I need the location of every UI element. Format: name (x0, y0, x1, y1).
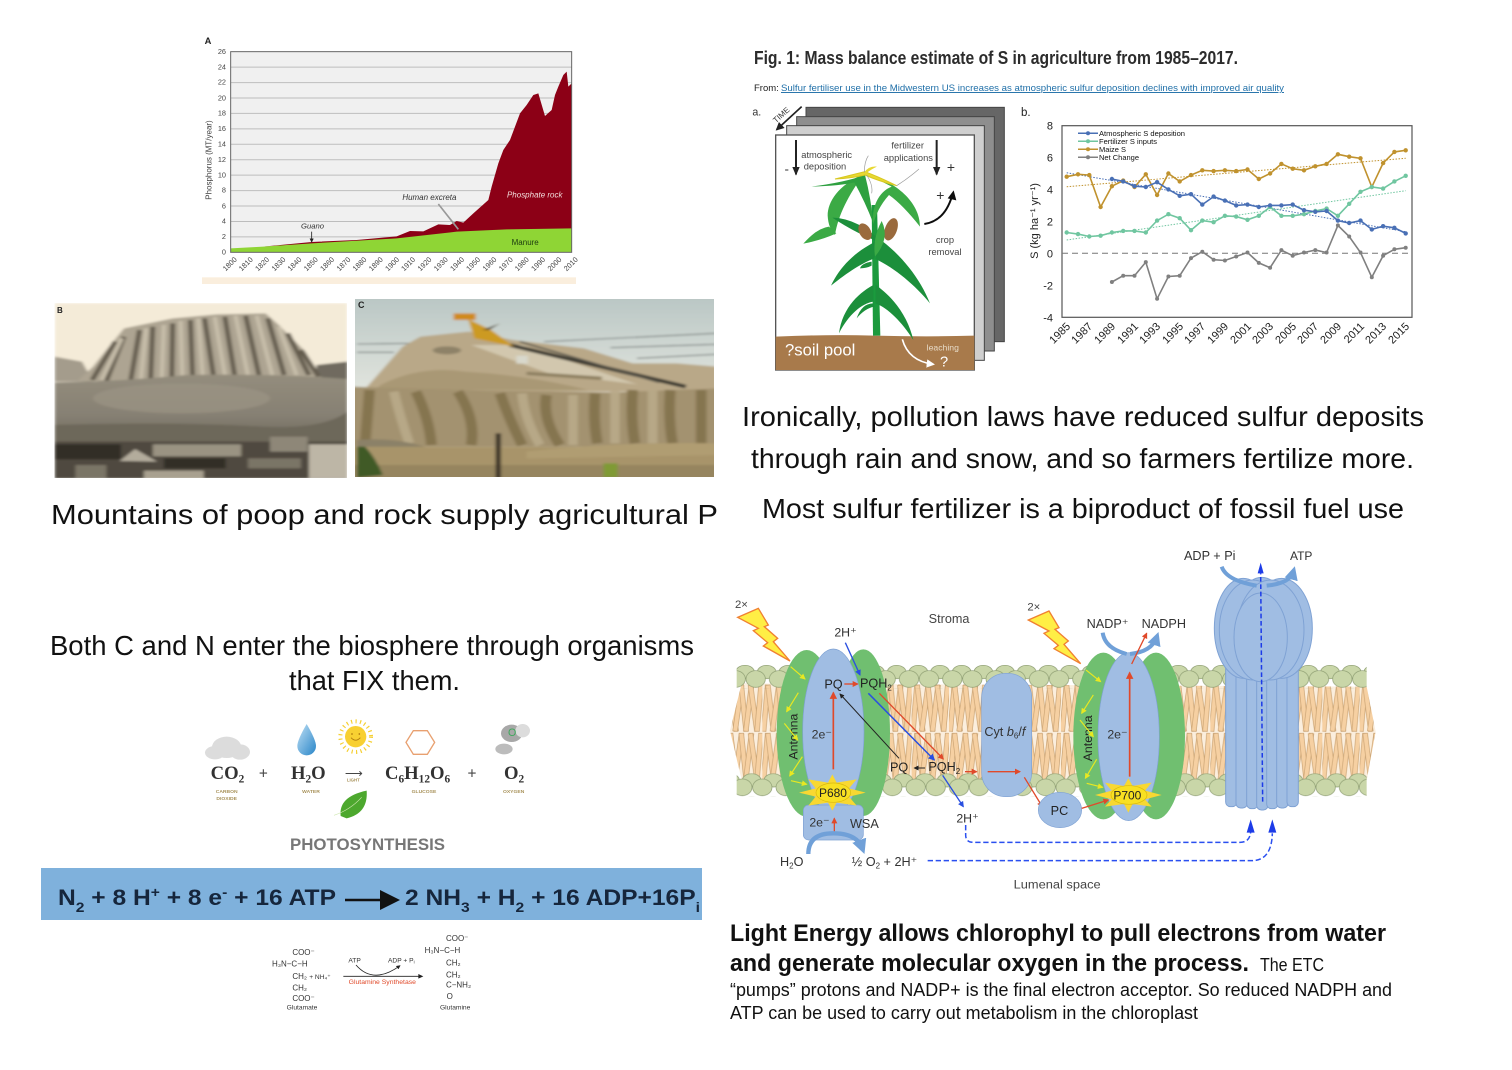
photo C: phosphate rock pile (350, 295, 721, 480)
chart A: phosphorus sources 1800-2010: 1850 (302, 255, 320, 273)
formula: + (468, 766, 477, 783)
chart A: phosphorus sources 1800-2010: Phosphate rock (507, 191, 563, 200)
formula: 2 (239, 773, 245, 785)
panel b: sulfur line chart: 2001 (1228, 321, 1254, 346)
formula: O (430, 763, 445, 784)
time arrow: TIME (771, 105, 792, 125)
panel b: sulfur line chart: 8 (1047, 120, 1053, 132)
series: atmospheric S deposition (1112, 179, 1406, 233)
chart A: phosphorus sources 1800-2010: 12 (218, 155, 226, 164)
series: maize S (1067, 150, 1406, 207)
photosystem II: Antenna (786, 714, 800, 760)
soil pool: ? (940, 355, 948, 371)
photo B: guano mountain: B (57, 306, 63, 315)
glutamine structure: H₃N−C−H (425, 946, 461, 955)
caption: light energy explanation: ATP can be used to carry out metabolism in the chloroplast (730, 1003, 1198, 1023)
icon: water drop (297, 724, 316, 755)
chart A: phosphorus sources 1800-2010: 16 (218, 124, 226, 133)
ATP synthase: ADP + Pi (1184, 549, 1235, 563)
glutamate structure: H₃N−C−H (272, 960, 308, 969)
formula: C (385, 763, 398, 784)
series: fertilizer S inputs (1067, 176, 1406, 236)
enzyme arrow: Glutamine Synthetase (349, 980, 417, 986)
glutamate structure: COO⁻ (292, 948, 315, 957)
formula: 6 (445, 773, 451, 785)
glutamate structure: CH₂ + NH₄⁺ (292, 972, 331, 981)
icon: cloud (205, 737, 250, 760)
formula: H (404, 763, 419, 784)
glutamine structure (425, 934, 471, 1012)
manure area (231, 228, 572, 252)
lightning bolt one (735, 599, 790, 661)
nitrogen fixation banner: 3 (461, 899, 470, 915)
glutamine structure: COO⁻ (446, 934, 468, 943)
formula: O (311, 763, 326, 784)
caption: pollution laws and sulfur: Ironically, pollution laws have reduced sulfur deposits (742, 401, 1424, 432)
formula: 2 (519, 773, 525, 785)
water and oxygen labels: 2 (876, 862, 881, 871)
nitrogen fixation banner: + H (470, 885, 516, 910)
figure source line: Sulfur fertiliser use in the Midwestern US increases as atmospheric sulfur deposition declines with improved air quality (781, 83, 1284, 94)
glutamate structure: COO⁻ (292, 994, 315, 1003)
nitrogen fixation banner: + 16 ADP+16P (524, 885, 696, 910)
plastoquinone shuttle arrows (840, 693, 979, 826)
photosystem II (777, 625, 892, 854)
caption: pollution laws and sulfur: through rain and snow, and so farmers fertilize more. (751, 443, 1414, 474)
text: lumenal space: Lumenal space (1014, 878, 1101, 892)
nitrogen fixation banner: - (222, 884, 228, 900)
photosystem II: 2e⁻ (812, 728, 832, 742)
maize plant (803, 156, 930, 340)
plastoquinone shuttle arrows: PQH (928, 760, 956, 774)
plastocyanin (1038, 792, 1108, 828)
text: stroma: Stroma (929, 612, 970, 626)
water splitting complex (803, 805, 879, 854)
crop removal arrow: removal (928, 247, 962, 257)
chart A: phosphorus sources 1800-2010: 14 (218, 139, 226, 148)
crop removal arrow: + (936, 187, 944, 203)
photosystem I: P700 (1113, 788, 1142, 802)
chart A: phosphorus sources 1800-2010: 22 (218, 78, 226, 87)
glutamine structure: C−NH₂ (446, 980, 471, 989)
panel a: maize sulfur budget diagram: a. (752, 107, 761, 119)
glutamine structure: CH₂ (446, 959, 461, 968)
caption: C and N fixation: that FIX them. (289, 665, 460, 696)
chart A: phosphorus sources 1800-2010: 10 (218, 170, 226, 179)
chart A: phosphorus sources 1800-2010: 2010 (562, 255, 580, 273)
glutamate structure (272, 948, 331, 1012)
proton dashed paths (928, 825, 1272, 861)
caption: light energy explanation: and generate molecular oxygen in the process. (730, 950, 1249, 977)
lightning bolt two (1027, 602, 1081, 664)
formula (211, 763, 525, 785)
nitrogen fixation banner: + 8 e (160, 885, 222, 910)
enzyme arrow (343, 957, 423, 986)
panel b: sulfur line chart: 2015 (1386, 321, 1412, 346)
photosynthetic electron transport chain diagram (730, 549, 1376, 892)
chart A: phosphorus sources 1800-2010: 1970 (497, 255, 515, 273)
panel b: sulfur line chart: 2 (1047, 216, 1053, 228)
chart A: phosphorus sources 1800-2010: 24 (218, 62, 226, 71)
ATP synthase (1184, 549, 1312, 810)
chart A: phosphorus sources 1800-2010: 8 (222, 186, 226, 195)
panel b: sulfur line chart: 1989 (1092, 321, 1118, 346)
chart A: phosphorus sources 1800-2010: 1910 (399, 255, 417, 273)
panel b: sulfur line chart: 1985 (1047, 321, 1073, 346)
photo B: guano mountain (55, 303, 347, 479)
chart A: phosphorus sources 1800-2010: 1830 (270, 255, 287, 273)
plastoquinone shuttle arrows: PQ (890, 761, 908, 775)
photosystem I: Antenna (1081, 715, 1095, 761)
formula labels: CARBON (216, 789, 238, 795)
cytochrome b6f: / (1018, 725, 1022, 739)
photosystem II: PQH (860, 677, 887, 691)
crop removal arrow: crop (936, 235, 954, 245)
chart A: phosphorus sources 1800-2010: 0 (222, 248, 226, 257)
chart A: phosphorus sources 1800-2010: 1990 (529, 255, 547, 273)
chart A: phosphorus sources 1800-2010: 1810 (237, 255, 255, 273)
nitrogen fixation banner: 2 (76, 899, 85, 915)
enzyme arrow: i (414, 960, 415, 965)
panel b: sulfur line chart: 2007 (1295, 321, 1321, 346)
panel b: sulfur line chart: 6 (1047, 152, 1053, 164)
water splitting complex: WSA (850, 817, 879, 831)
nitrogen fixation banner: N (58, 885, 74, 910)
deposition and fertilizer arrows: deposition (804, 162, 846, 172)
chart A: phosphorus sources 1800-2010: 4 (222, 217, 226, 226)
lightning bolt one: 2× (735, 599, 748, 611)
chart A: phosphorus sources 1800-2010: A (205, 36, 212, 46)
chart A: phosphorus sources 1800-2010: Phosphorus (MT/year) (204, 120, 213, 200)
lipid membrane (730, 665, 1376, 797)
photosystem II: 2H⁺ (834, 625, 857, 639)
deposition and fertilizer arrows: atmospheric (801, 150, 852, 160)
photosystem I: 2e⁻ (1107, 728, 1128, 742)
icon: oxygen cloud: O (508, 727, 516, 739)
panel b: sulfur line chart (1021, 107, 1412, 346)
formula: O (504, 763, 519, 784)
chart A: phosphorus sources 1800-2010: 1800 (221, 255, 239, 273)
formula labels: DIOXIDE (216, 796, 238, 802)
P680 star: P680 (819, 786, 847, 800)
caption: sulfur fertilizer source: Most sulfur fertilizer is a biproduct of fossil fuel use (762, 493, 1404, 524)
chart A: phosphorus sources 1800-2010: 1840 (286, 255, 303, 273)
panel b: sulfur line chart: 4 (1047, 184, 1053, 196)
water and oxygen labels: 2 (789, 862, 794, 871)
chart A: phosphorus sources 1800-2010 (202, 36, 580, 284)
chart A: phosphorus sources 1800-2010: Manure (512, 238, 539, 247)
water and oxygen labels: ½ O (852, 855, 876, 869)
deposition and fertilizer arrows: fertilizer (891, 141, 924, 151)
formula: 2 (306, 773, 312, 785)
lightning bolt two: 2× (1027, 602, 1040, 614)
glutamine structure: Glutamine (440, 1005, 471, 1012)
photosynthesis equation (205, 721, 530, 818)
figure title: Fig. 1: Mass balance estimate of S in agriculture from 1985–2017. (754, 48, 1238, 68)
photosystem I (1073, 617, 1186, 821)
panel b: sulfur line chart: 1999 (1205, 321, 1231, 346)
icon: leaf (334, 791, 367, 818)
panel b: sulfur line chart: 1993 (1137, 321, 1163, 346)
deposition and fertilizer arrows: applications (884, 153, 933, 163)
chart A: phosphorus sources 1800-2010: 1880 (351, 255, 368, 273)
formula: ⟶ (345, 767, 363, 781)
caption: C and N fixation (50, 630, 694, 696)
caption: C and N fixation: Both C and N enter the biosphere through organisms (50, 630, 694, 661)
photosystem I: NADP⁺ (1087, 617, 1129, 631)
chart A: phosphorus sources 1800-2010: 1860 (318, 255, 336, 273)
photosystem II: 2 (887, 684, 892, 693)
panel b: sulfur line chart: S (kg ha⁻¹ yr⁻¹) (1029, 183, 1041, 259)
glutamate structure: CH₂ (292, 984, 307, 993)
formula: 12 (419, 773, 430, 785)
nitrogen fixation banner: + 8 H (84, 885, 151, 910)
glutamine structure: CH₂ (446, 970, 461, 979)
icon: sun (340, 721, 371, 752)
ATP synthase: ATP (1290, 549, 1312, 563)
nitrogen fixation banner (41, 868, 702, 920)
caption: mountains of poop and rock: Mountains of poop and rock supply agricultural P (51, 499, 718, 530)
nitrogen fixation banner: + 16 ATP (227, 885, 336, 910)
chart A: phosphorus sources 1800-2010: 26 (218, 47, 226, 56)
water and oxygen labels: + 2H⁺ (880, 855, 917, 869)
panel b: sulfur line chart: 2011 (1342, 321, 1367, 346)
formula: 6 (398, 773, 404, 785)
soil pool: leaching (927, 342, 959, 352)
formula: CO (211, 763, 239, 784)
cytochrome b6f: f (1022, 725, 1027, 739)
panel b: sulfur line chart: 2003 (1250, 321, 1276, 346)
legend: Atmospheric S deposition (1099, 129, 1185, 138)
chart A: phosphorus sources 1800-2010: 1920 (416, 255, 433, 273)
nitrogen fixation banner: 2 NH (405, 885, 455, 910)
figure source line: From: (754, 83, 779, 94)
soil pool (776, 335, 974, 371)
soil pool: ?soil pool (785, 341, 855, 360)
crop removal arrow (924, 187, 962, 257)
chart A: phosphorus sources 1800-2010: 2 (222, 232, 226, 241)
water and oxygen labels (780, 855, 917, 871)
panel b: sulfur line chart: 1995 (1160, 321, 1186, 346)
panel b: sulfur line chart: b. (1021, 107, 1031, 119)
formula: + (259, 766, 268, 783)
water and oxygen labels: O (794, 855, 804, 869)
legend (1078, 129, 1185, 162)
enzyme arrow: ATP (348, 957, 361, 964)
plastoquinone shuttle arrows: 2H⁺ (956, 812, 979, 826)
panel b: sulfur line chart: 1991 (1115, 321, 1141, 346)
cytochrome b6f (982, 673, 1042, 807)
chart A: phosphorus sources 1800-2010: 1980 (513, 255, 531, 273)
deposition and fertilizer arrows: - (784, 161, 789, 176)
cytochrome b6f: 6 (1014, 732, 1019, 741)
plastocyanin: PC (1051, 804, 1068, 818)
panel a: maize sulfur budget diagram (752, 105, 1004, 371)
panel b: sulfur line chart: 0 (1047, 248, 1053, 260)
P680 star (799, 774, 866, 811)
water and oxygen labels: H (780, 855, 789, 869)
time arrow (771, 105, 802, 130)
water splitting complex: 2e⁻ (809, 816, 830, 830)
chart A: phosphorus sources 1800-2010: 1960 (481, 255, 498, 273)
nitrogen fixation banner: 2 (516, 899, 525, 915)
chart A: phosphorus sources 1800-2010: Human excreta (402, 193, 457, 202)
chart A: phosphorus sources 1800-2010: 1870 (335, 255, 352, 273)
legend: Net Change (1099, 153, 1139, 162)
formula labels: GLUCOSE (412, 789, 437, 795)
chart A: phosphorus sources 1800-2010: Guano (301, 222, 325, 231)
glutamate structure: Glutamate (287, 1005, 318, 1012)
series: net change (1112, 225, 1406, 299)
cytochrome b6f: Cyt b (984, 725, 1014, 739)
panel b: sulfur line chart: 2009 (1318, 321, 1344, 346)
panel b: sulfur line chart: -4 (1043, 312, 1053, 324)
panel b: sulfur line chart: 2013 (1363, 321, 1389, 346)
panel b: sulfur line chart: 2005 (1273, 321, 1299, 346)
photo C: phosphate rock pile: C (358, 300, 365, 310)
formula labels (216, 778, 525, 802)
enzyme arrow: ADP + P (388, 957, 414, 964)
chart A: phosphorus sources 1800-2010: 1950 (464, 255, 482, 273)
plastoquinone shuttle arrows: 2 (956, 767, 961, 776)
caption: light energy explanation: Light Energy allows chlorophyl to pull electrons from water (730, 920, 1386, 947)
photosystem I: NADPH (1142, 617, 1186, 631)
chart A: phosphorus sources 1800-2010: 2000 (546, 255, 563, 273)
nitrogen fixation banner: + (151, 884, 160, 900)
formula labels: OXYGEN (503, 789, 525, 795)
trend lines (1067, 158, 1406, 240)
chart A: phosphorus sources 1800-2010: 20 (218, 93, 226, 102)
chart A: phosphorus sources 1800-2010: 1930 (432, 255, 450, 273)
deposition and fertilizer arrows: + (947, 159, 955, 175)
caption: light energy explanation: The ETC (1260, 955, 1324, 975)
legend: Maize S (1099, 145, 1126, 154)
chart A: phosphorus sources 1800-2010: 1890 (367, 255, 385, 273)
nitrogen fixation banner: i (696, 899, 700, 915)
chart A: phosphorus sources 1800-2010: 1900 (383, 255, 401, 273)
glutamine structure: O (447, 992, 453, 1001)
panel b: sulfur line chart: 1997 (1182, 321, 1208, 346)
formula labels: LIGHT (347, 778, 360, 783)
photosystem II: PQ (824, 678, 843, 692)
legend: Fertilizer S inputs (1099, 137, 1157, 146)
icon: glucose hexagon (406, 731, 435, 754)
proton arrowheads (1247, 819, 1276, 833)
panel b: sulfur line chart: -2 (1043, 280, 1053, 292)
caption: pollution laws and sulfur (742, 401, 1424, 474)
photosynthesis label: PHOTOSYNTHESIS (290, 835, 445, 854)
chart A: phosphorus sources 1800-2010: 6 (222, 201, 226, 210)
chart A: phosphorus sources 1800-2010: 1940 (448, 255, 466, 273)
chart A: phosphorus sources 1800-2010: 1820 (253, 255, 271, 273)
caption: light energy explanation (730, 920, 1392, 1023)
deposition and fertilizer arrows (784, 140, 955, 176)
chart A: phosphorus sources 1800-2010: 18 (218, 109, 226, 118)
phosphate rock area (263, 72, 572, 247)
icon: oxygen cloud (495, 724, 530, 754)
panel b: sulfur line chart: 1987 (1069, 321, 1095, 346)
glutamine synthetase reaction (272, 934, 471, 1012)
formula: H (291, 763, 306, 784)
formula labels: WATER (302, 789, 320, 795)
caption: light energy explanation: “pumps” protons and NADP+ is the final electron acceptor. So reduced NADPH and (730, 980, 1392, 1000)
